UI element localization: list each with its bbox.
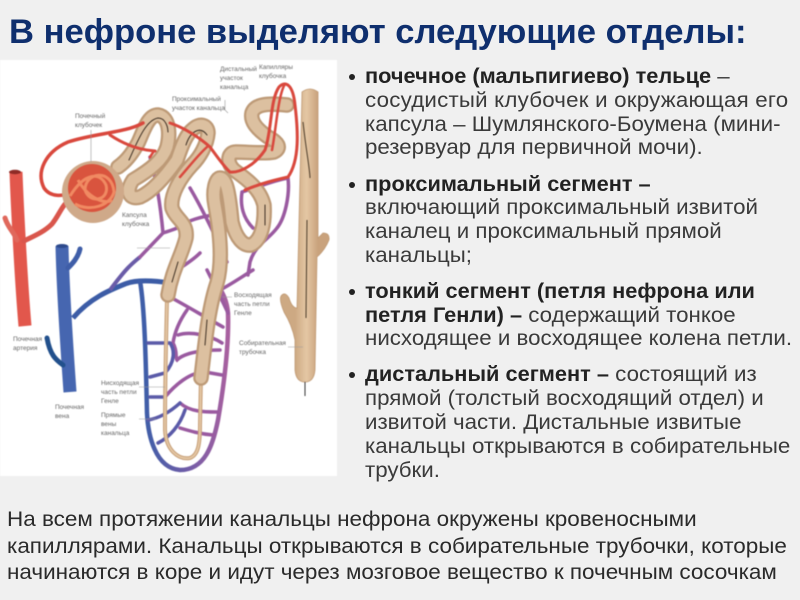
labels with leader lines	[13, 64, 303, 437]
text: канальцы;	[365, 243, 472, 267]
text: капиллярами. Канальцы открываются в собирательные трубочки, которые	[7, 534, 787, 558]
text: сосудистый клубочек и окружающая его	[365, 88, 788, 112]
labels with leader lines: Капилляры	[259, 64, 293, 71]
labels with leader lines: канальца	[220, 84, 249, 91]
text: включающий проксимальный извитой	[365, 195, 758, 219]
labels with leader lines: Проксимальный	[172, 95, 221, 103]
labels with leader lines: канальца	[101, 430, 130, 437]
labels with leader lines: часть петли	[234, 301, 270, 308]
panel: nephron diagram	[0, 60, 337, 476]
labels with leader lines: клубочка	[122, 220, 150, 228]
labels with leader lines: участок	[220, 75, 243, 82]
text: петля Генли) – содержащий тонкое	[365, 303, 736, 327]
collecting duct	[280, 89, 329, 396]
text: канальцы открываются в собирательные	[365, 434, 790, 458]
text: тонкий сегмент (петля нефрона или	[365, 280, 755, 303]
labels with leader lines: Почечная	[13, 336, 43, 343]
labels with leader lines: вены	[101, 421, 117, 428]
labels with leader lines: Генле	[234, 310, 252, 317]
labels with leader lines: Генле	[101, 398, 119, 405]
tubule: proximal convoluted part, thin loop, distal part	[118, 104, 287, 458]
labels with leader lines: Почечная	[55, 404, 85, 411]
text: извитой части. Дистальные извитые	[365, 410, 741, 434]
labels with leader lines: Дистальный	[220, 65, 257, 73]
text: дистальный сегмент – состоящий из	[365, 362, 757, 386]
labels with leader lines: Собирательная	[239, 339, 286, 347]
text: капсула – Шумлянского-Боумена (мини-	[365, 112, 781, 136]
text: каналец и проксимальный прямой	[365, 219, 722, 243]
labels with leader lines: Капсула	[122, 212, 147, 219]
bullet: renal corpuscle	[349, 64, 788, 159]
text: На всем протяжении канальцы нефрона окружены кровеносными	[7, 507, 697, 531]
labels with leader lines: Прямые	[101, 412, 126, 419]
labels with leader lines: клубочка	[259, 72, 287, 80]
text: прямой (толстый восходящий отдел) и	[365, 386, 764, 410]
labels with leader lines: клубочек	[75, 121, 102, 129]
labels with leader lines: Нисходящая	[101, 380, 139, 387]
text: резервуар для первичной мочи).	[365, 135, 703, 159]
bullet: proximal segment	[349, 173, 758, 267]
bullet: distal segment	[349, 362, 790, 482]
text: начинаются в коре и идут через мозговое вещество к почечным сосочкам	[7, 560, 777, 584]
footer text	[7, 507, 787, 584]
text: проксимальный сегмент –	[365, 173, 651, 196]
text: почечное (мальпигиево) тельце –	[365, 64, 730, 88]
renal artery	[5, 170, 72, 326]
labels with leader lines: участок канальца	[172, 105, 225, 112]
title: В нефроне выделяют следующие отделы:	[9, 13, 747, 51]
afferent and efferent arterioles, glomerular capillaries	[41, 84, 297, 195]
labels with leader lines: вена	[55, 413, 70, 420]
labels with leader lines: Восходящая	[234, 292, 272, 299]
labels with leader lines: часть петли	[101, 389, 137, 396]
text: трубки.	[365, 458, 440, 482]
renal vein	[47, 244, 170, 392]
labels with leader lines: Почечный	[75, 112, 106, 120]
bullet: thin segment	[349, 280, 792, 350]
labels with leader lines: трубочка	[239, 348, 266, 356]
bullet list	[349, 64, 792, 482]
capillary network	[140, 157, 288, 470]
text: нисходящее и восходящее колена петли.	[365, 326, 792, 350]
labels with leader lines: артерия	[13, 345, 38, 352]
glomerulus	[62, 161, 124, 223]
